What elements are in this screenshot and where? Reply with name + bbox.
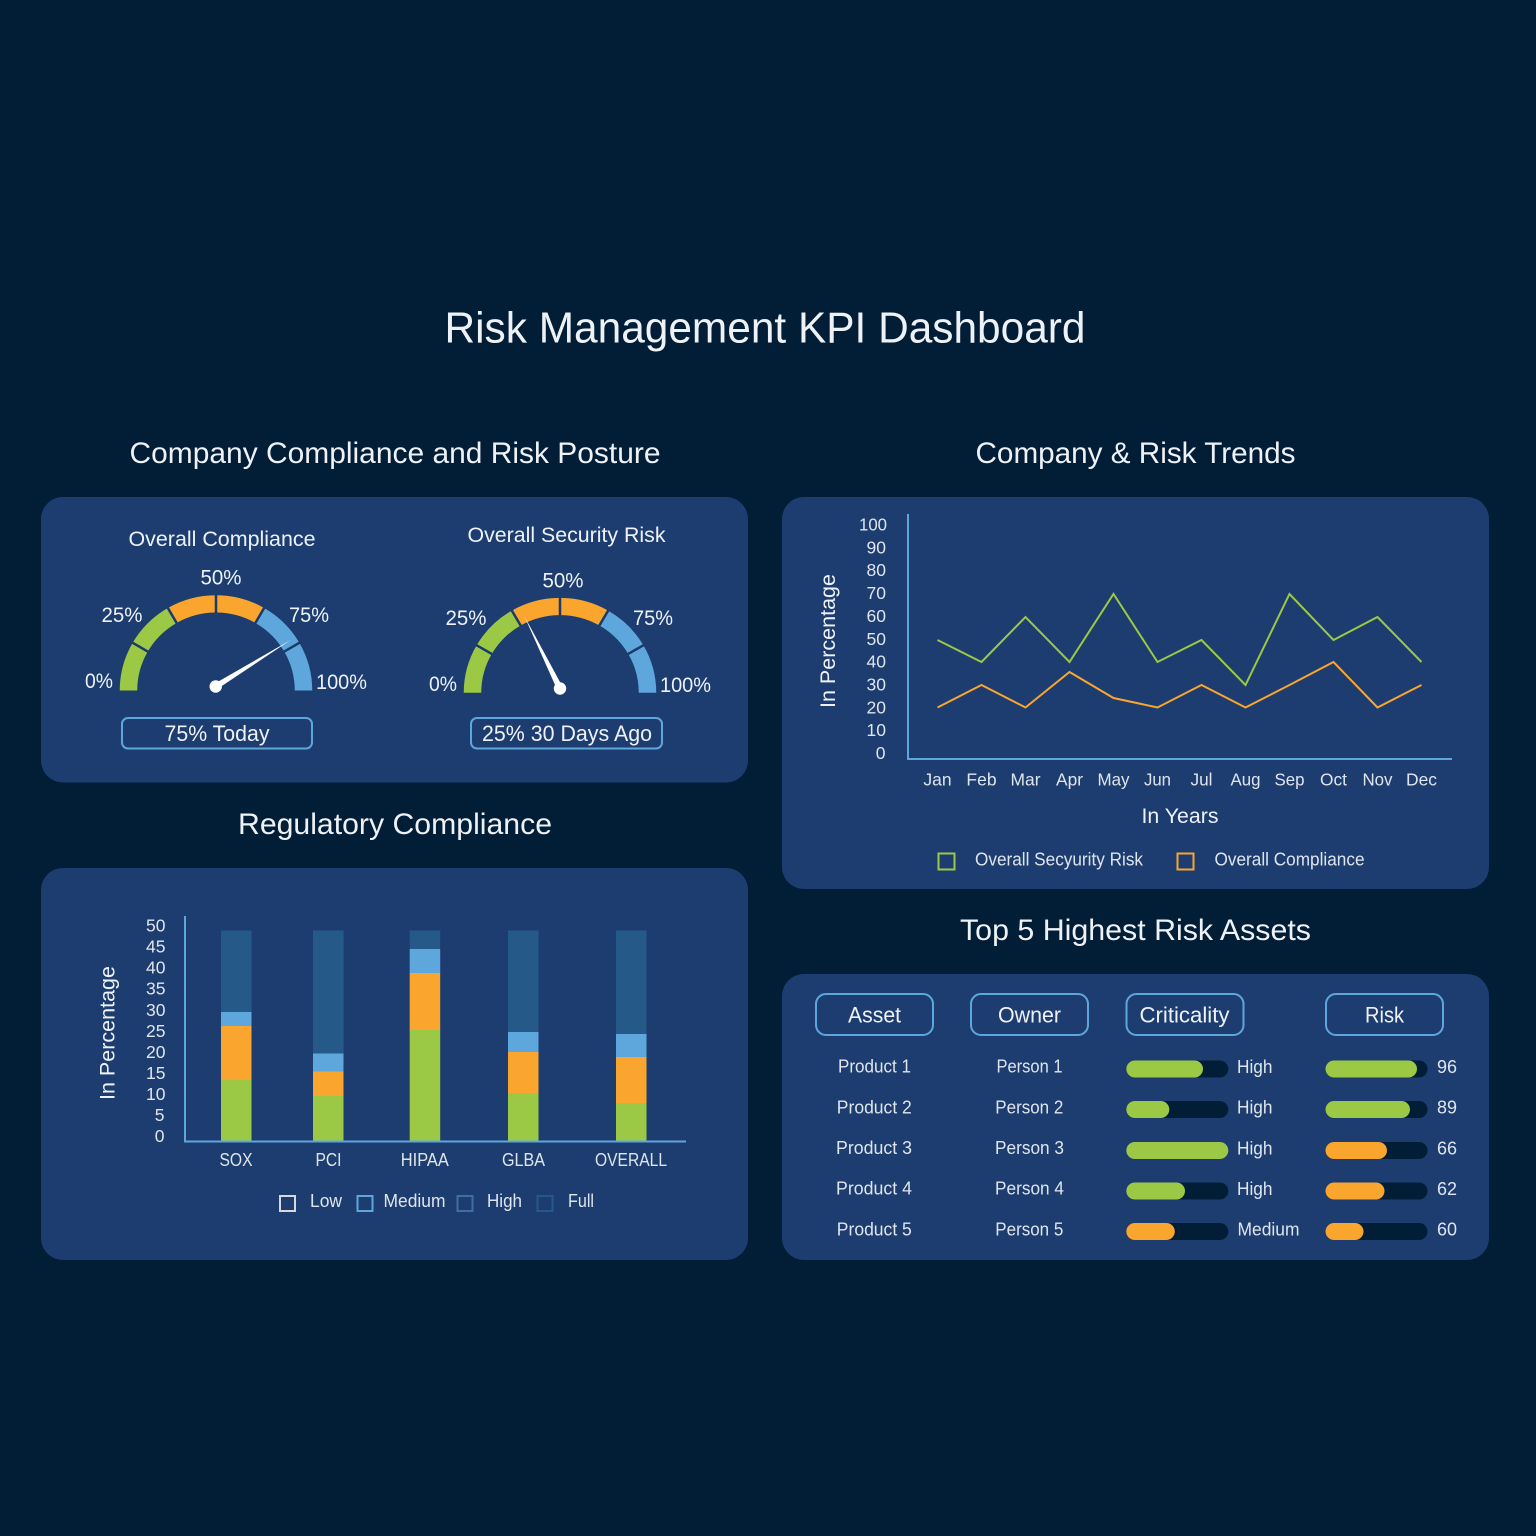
asset names: Product 5	[837, 1220, 912, 1240]
x axis labels: HIPAA	[401, 1150, 449, 1170]
y axis labels: 5	[155, 1105, 164, 1125]
gauge labels: 25%	[446, 606, 486, 630]
y axis labels: 50	[867, 629, 886, 649]
gauge labels: 25%	[102, 603, 142, 627]
bar: GLBA	[508, 930, 538, 1141]
criticality labels	[1237, 1057, 1300, 1240]
owner names: Person 5	[995, 1220, 1063, 1240]
x axis title: In Years	[1142, 804, 1218, 828]
column header: asset	[816, 994, 933, 1035]
risk values: 60	[1437, 1220, 1457, 1240]
gauge labels: 100%	[660, 673, 711, 697]
gauge labels: 50%	[200, 566, 242, 590]
asset names: Product 2	[837, 1098, 912, 1118]
y axis title: In Percentage	[96, 966, 120, 1100]
x axis labels: Apr	[1056, 770, 1083, 790]
heading: compliance and risk posture: Company Compliance and Risk Posture	[130, 437, 660, 470]
column header: owner: Owner	[998, 1002, 1061, 1028]
legend: Medium	[384, 1191, 446, 1211]
x axis labels: Jul	[1190, 770, 1212, 790]
x axis labels	[220, 1150, 667, 1170]
x axis labels: Oct	[1320, 770, 1347, 790]
x axis labels: Jan	[923, 770, 952, 790]
y axis labels: 30	[146, 1000, 166, 1020]
gauge dial	[128, 594, 304, 690]
legend: Overall Secyurity Risk	[975, 850, 1144, 870]
criticality labels: High	[1237, 1057, 1272, 1077]
risk values: 62	[1437, 1179, 1457, 1199]
criticality labels: Medium	[1238, 1220, 1300, 1240]
gauge dial	[472, 597, 648, 693]
y axis labels: 20	[146, 1042, 166, 1062]
y axis labels: 80	[867, 560, 886, 580]
gauge labels	[85, 566, 367, 694]
gauge needle	[210, 640, 291, 693]
column header: risk: Risk	[1365, 1002, 1405, 1028]
y axis labels: 70	[867, 583, 886, 603]
owner names: Person 4	[995, 1178, 1064, 1198]
heading: regulatory compliance: Regulatory Compliance	[238, 808, 552, 841]
gauge value box	[122, 718, 312, 748]
legend: Overall Compliance	[1214, 850, 1364, 870]
gauge: overall compliance	[85, 527, 367, 748]
x axis labels: PCI	[316, 1150, 342, 1170]
legend: Full	[568, 1191, 594, 1211]
y axis labels: 50	[146, 916, 166, 936]
gauge labels	[429, 568, 711, 697]
bar: HIPAA	[410, 930, 440, 1141]
axes	[908, 514, 1452, 759]
y axis labels: 90	[867, 538, 886, 558]
x axis labels: Feb	[966, 770, 997, 790]
x axis labels: Aug	[1230, 770, 1260, 790]
risk bars	[1326, 1060, 1428, 1240]
y axis labels: 40	[146, 958, 166, 978]
gauge needle	[524, 616, 566, 695]
owner names	[995, 1056, 1064, 1240]
column header: criticality	[1126, 994, 1244, 1035]
gauge labels: 75%	[633, 606, 673, 630]
y axis labels: 45	[146, 936, 166, 956]
y axis title: In Percentage	[816, 574, 840, 708]
gauge title: Overall Compliance	[128, 527, 316, 551]
y axis labels: 60	[867, 606, 886, 626]
axes	[185, 916, 686, 1142]
y axis labels: 35	[146, 978, 166, 998]
panel: regulatory compliance	[41, 868, 748, 1260]
risk values	[1437, 1057, 1457, 1240]
criticality bars	[1126, 1060, 1228, 1240]
x axis labels: Jun	[1144, 770, 1171, 790]
gauge labels: 100%	[316, 670, 367, 694]
legend	[280, 1191, 594, 1211]
heading: top 5 assets: Top 5 Highest Risk Assets	[960, 914, 1311, 947]
x axis labels: Sep	[1274, 770, 1304, 790]
x axis labels: Mar	[1010, 770, 1041, 790]
column header: risk	[1326, 994, 1443, 1035]
bar: SOX	[221, 930, 252, 1141]
owner names: Person 1	[996, 1056, 1062, 1076]
bar: PCI	[313, 930, 344, 1141]
y axis labels: 30	[867, 674, 886, 694]
y axis labels: 20	[867, 698, 886, 718]
line: overall compliance	[938, 662, 1422, 708]
heading: trends: Company & Risk Trends	[976, 437, 1296, 470]
risk values: 89	[1437, 1098, 1457, 1118]
column header: criticality: Criticality	[1140, 1002, 1230, 1028]
legend: High	[487, 1191, 522, 1211]
bar: OVERALL	[616, 930, 646, 1141]
gauge value box: 25% 30 Days Ago	[482, 721, 652, 746]
gauge value box: 75% Today	[164, 721, 270, 746]
x axis labels: SOX	[220, 1150, 252, 1170]
line chart	[816, 514, 1452, 870]
legend	[938, 850, 1364, 870]
asset names	[836, 1056, 912, 1240]
gauge: overall security risk	[429, 523, 711, 748]
y axis labels	[859, 514, 887, 763]
legend: Low	[310, 1191, 343, 1211]
y axis labels: 100	[859, 514, 887, 534]
x axis labels: GLBA	[502, 1150, 545, 1170]
gauge labels: 50%	[542, 568, 584, 592]
gauge labels: 0%	[429, 672, 457, 696]
stacked bar chart	[96, 916, 686, 1211]
x axis labels: OVERALL	[595, 1150, 667, 1170]
gauge title: Overall Security Risk	[468, 523, 666, 547]
x axis labels: May	[1098, 770, 1130, 790]
title: Risk Management KPI Dashboard	[444, 304, 1086, 352]
y axis labels: 10	[146, 1084, 166, 1104]
risk values: 66	[1437, 1138, 1457, 1158]
y axis labels: 0	[155, 1126, 165, 1146]
y axis labels: 0	[876, 743, 886, 763]
risk values: 96	[1437, 1057, 1457, 1077]
column header: owner	[971, 994, 1088, 1035]
x axis labels: Nov	[1362, 770, 1393, 790]
y axis labels: 10	[867, 720, 886, 740]
owner names: Person 2	[995, 1098, 1063, 1118]
gauge labels: 0%	[85, 669, 113, 693]
owner names: Person 3	[995, 1138, 1064, 1158]
asset names: Product 3	[836, 1138, 912, 1158]
x axis labels: Dec	[1406, 770, 1437, 790]
y axis labels: 25	[146, 1021, 166, 1041]
column header: asset: Asset	[848, 1002, 902, 1028]
y axis labels: 15	[146, 1063, 166, 1083]
asset names: Product 1	[838, 1056, 911, 1076]
panel: top 5 assets table	[782, 974, 1489, 1260]
gauge labels: 75%	[289, 603, 329, 627]
criticality labels: High	[1237, 1138, 1272, 1158]
panel: compliance and risk posture	[41, 497, 748, 782]
x axis labels	[923, 770, 1437, 790]
line: overall security risk	[938, 594, 1422, 685]
asset names: Product 4	[836, 1178, 912, 1198]
y axis labels: 40	[867, 652, 886, 672]
y axis labels	[146, 916, 166, 1146]
criticality labels: High	[1237, 1098, 1272, 1118]
criticality labels: High	[1237, 1179, 1272, 1199]
panel: trends	[782, 497, 1489, 889]
